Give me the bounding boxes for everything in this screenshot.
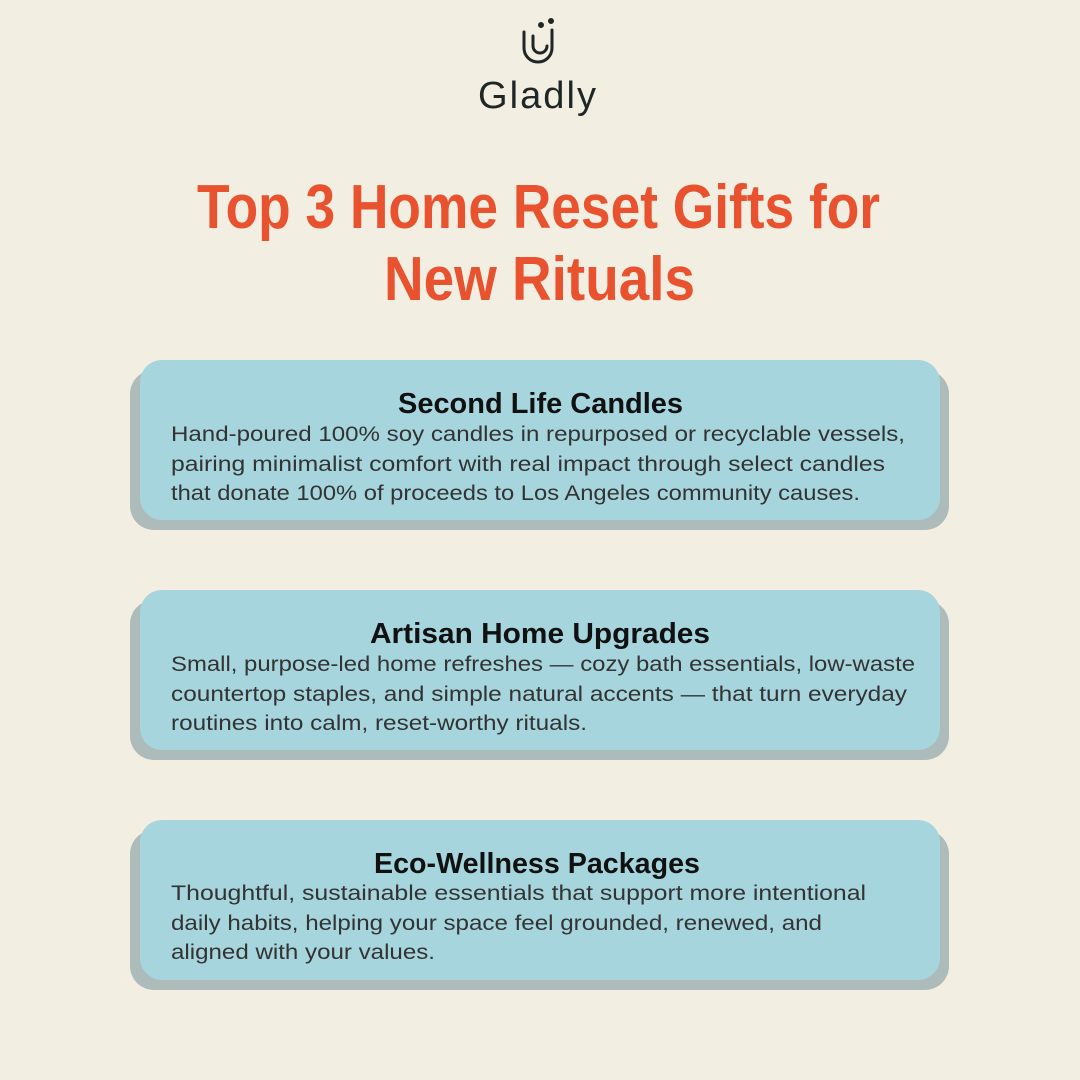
text block: that donate 100% of proceeds to Los Angeles community causes. bbox=[171, 482, 860, 505]
text block: daily habits, helping your space feel grounded, renewed, and bbox=[171, 912, 822, 935]
text block bbox=[171, 653, 915, 735]
panel: Eco-Wellness Packages bbox=[130, 820, 949, 990]
title: New Rituals bbox=[384, 245, 695, 314]
title bbox=[197, 173, 880, 314]
logo bbox=[478, 20, 598, 117]
text block: routines into calm, reset-worthy rituals. bbox=[171, 712, 587, 735]
text block bbox=[171, 423, 905, 505]
icon: logo mark bbox=[524, 20, 552, 62]
panel: Second Life Candles bbox=[130, 360, 949, 530]
heading: Second Life Candles bbox=[398, 388, 683, 420]
text block: Thoughtful, sustainable essentials that support more intentional bbox=[171, 882, 866, 905]
text block: Small, purpose-led home refreshes — cozy bath essentials, low-waste bbox=[171, 653, 915, 676]
text block: countertop staples, and simple natural accents — that turn everyday bbox=[171, 683, 908, 706]
text block: pairing minimalist comfort with real impact through select candles bbox=[171, 453, 885, 476]
text block: Hand-poured 100% soy candles in repurposed or recyclable vessels, bbox=[171, 423, 905, 446]
panel: Artisan Home Upgrades bbox=[130, 590, 949, 760]
title: Top 3 Home Reset Gifts for bbox=[197, 173, 880, 242]
text block bbox=[171, 882, 866, 964]
brand name: Gladly bbox=[478, 75, 598, 117]
heading: Eco-Wellness Packages bbox=[374, 848, 700, 880]
heading: Artisan Home Upgrades bbox=[370, 618, 710, 650]
text block: aligned with your values. bbox=[171, 941, 435, 964]
